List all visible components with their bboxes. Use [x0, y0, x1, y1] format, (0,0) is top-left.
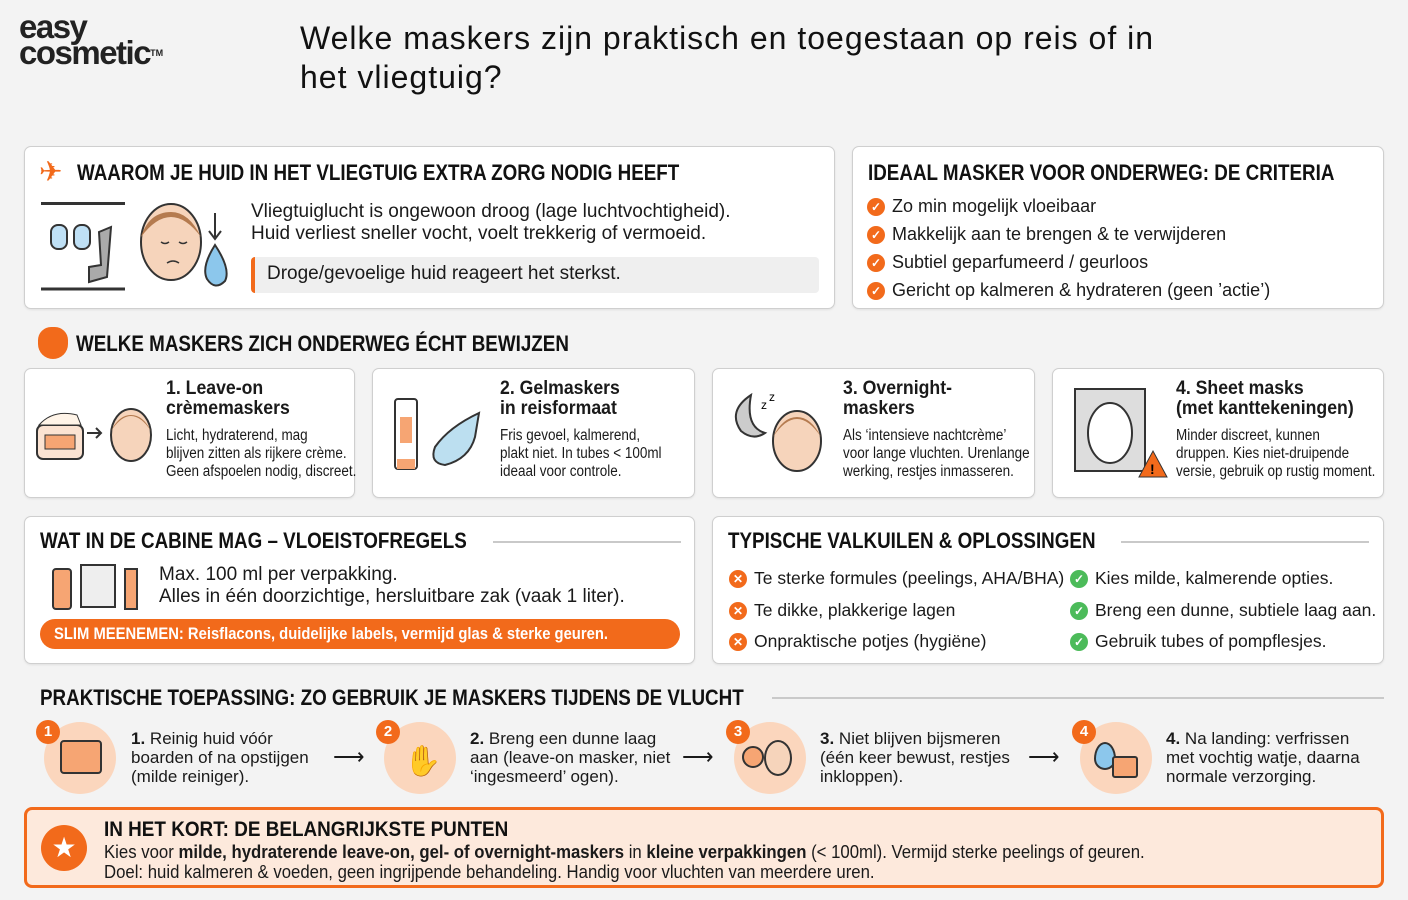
- callout: [251, 257, 819, 293]
- logo: [19, 8, 163, 71]
- icon: tube and gel: [394, 398, 480, 470]
- steps row: [36, 720, 1360, 794]
- solutions list: ✓: [1074, 604, 1084, 618]
- panel: why skin needs care: [24, 146, 835, 309]
- step 2: ✋: [404, 745, 441, 778]
- callout: orange bar: SLIM MEENEMEN: Reisflacons, duidelijke labels, vermijd glas & sterke geuren.: [54, 624, 608, 643]
- text block: [159, 564, 625, 607]
- text block: Vliegtuiglucht is ongewoon droog (lage luchtvochtigheid).: [251, 201, 731, 222]
- checklist: ✓: [871, 256, 881, 270]
- card 3: voor lange vluchten. Urenlange: [843, 445, 1030, 462]
- checklist: Gericht op kalmeren & hydrateren (geen ’actie’): [892, 280, 1270, 300]
- section heading: WELKE MASKERS ZICH ONDERWEG ÉCHT BEWIJZEN: [76, 331, 569, 356]
- card 4: druppen. Kies niet-druipende: [1176, 445, 1349, 462]
- step 4: 4: [1080, 723, 1088, 740]
- step 2: [376, 720, 670, 794]
- step 3: (één keer bewust, restjes: [820, 748, 1010, 767]
- step 4: 4. Na landing: verfrissen: [1166, 729, 1349, 748]
- icon: mask: [38, 327, 68, 359]
- arrow: ⟶: [333, 744, 365, 769]
- checklist: [867, 196, 1270, 300]
- heading: IDEAAL MASKER VOOR ONDERWEG: DE CRITERIA: [868, 160, 1334, 185]
- card 4: [1052, 368, 1384, 498]
- icon: moon and face: z: [761, 398, 767, 412]
- section heading: practical: PRAKTISCHE TOEPASSING: ZO GEBRUIK JE MASKERS TIJDENS DE VLUCHT: [40, 685, 744, 710]
- card text: 2. Gelmaskers: [500, 378, 620, 399]
- title: Welke maskers zijn praktisch en toegestaan op reis of in: [300, 20, 1154, 56]
- checklist: ✓: [871, 228, 881, 242]
- step 3: [726, 720, 1010, 794]
- step 1: boarden of na opstijgen: [131, 748, 309, 767]
- title: het vliegtuig?: [300, 59, 503, 95]
- title: [300, 20, 1154, 95]
- checklist: Makkelijk aan te brengen & te verwijderen: [892, 224, 1226, 244]
- card text: maskers: [843, 398, 915, 419]
- step 1: 1. Reinig huid vóór: [131, 729, 273, 748]
- solutions list: Kies milde, kalmerende opties.: [1095, 568, 1333, 588]
- icon: cabin and face: [41, 202, 228, 290]
- icon: plane: ✈: [39, 155, 62, 188]
- card 3: werking, restjes inmasseren.: [843, 463, 1014, 480]
- text block: [251, 201, 731, 244]
- text block: Huid verliest sneller vocht, voelt trekkerig of vermoeid.: [251, 223, 706, 244]
- card 3: Als ‘intensieve nachtcrème’: [843, 427, 1006, 444]
- icon: sheet mask warning: [1074, 388, 1168, 478]
- heading: WAT IN DE CABINE MAG – VLOEISTOFREGELS: [40, 528, 467, 553]
- card 1: Licht, hydraterend, mag: [166, 427, 308, 444]
- solutions list: Breng een dunne, subtiele laag aan.: [1095, 600, 1376, 620]
- solutions list: ✓: [1074, 635, 1084, 649]
- heading: TYPISCHE VALKUILEN & OPLOSSINGEN: [728, 528, 1096, 553]
- pitfalls list: Onpraktische potjes (hygiëne): [754, 631, 986, 651]
- step 2: 2: [384, 723, 392, 740]
- card text: crèmemaskers: [166, 398, 290, 419]
- step 4: [1072, 720, 1360, 794]
- text block: Max. 100 ml per verpakking.: [159, 564, 398, 585]
- card 4: Minder discreet, kunnen: [1176, 427, 1320, 444]
- card 1: [24, 368, 355, 498]
- step 3: inkloppen).: [820, 767, 903, 786]
- callout: orange bar: [40, 619, 680, 649]
- solutions list: Gebruik tubes of pompflesjes.: [1095, 631, 1327, 651]
- icon: moon and face: [734, 390, 822, 472]
- step 4: met vochtig watje, daarna: [1166, 748, 1360, 767]
- pitfalls list: ✕: [733, 635, 743, 649]
- text block: Alles in één doorzichtige, hersluitbare zak (vaak 1 liter).: [159, 586, 625, 607]
- pitfalls list: Te dikke, plakkerige lagen: [754, 600, 955, 620]
- pitfalls list: ✕: [733, 572, 743, 586]
- card 2: Fris gevoel, kalmerend,: [500, 427, 640, 444]
- panel: liquid rules: [24, 516, 695, 664]
- step 2: ‘ingesmeerd’ ogen).: [470, 767, 619, 786]
- step 3: 3. Niet blijven bijsmeren: [820, 729, 1000, 748]
- step 3: 3: [734, 723, 742, 740]
- card text: 4. Sheet masks: [1176, 378, 1304, 399]
- step 2: 2. Breng een dunne laag: [470, 729, 656, 748]
- card 3: [712, 368, 1035, 498]
- card text: in reisformaat: [500, 398, 617, 419]
- solutions list: ✓: [1074, 572, 1084, 586]
- card 1: blijven zitten als rijkere crème.: [166, 445, 347, 462]
- summary text: Kies voor milde, hydraterende leave-on, gel- of overnight-maskers in kleine verpakkingen (< 100ml). Vermijd sterke peelings of geuren.: [104, 842, 1145, 862]
- icon: jar to face: [36, 408, 152, 462]
- icon: moon and face: z: [769, 390, 775, 404]
- card text: [843, 378, 952, 419]
- summary box: [24, 807, 1384, 888]
- checklist: Zo min mogelijk vloeibaar: [892, 196, 1096, 216]
- checklist: Subtiel geparfumeerd / geurloos: [892, 252, 1148, 272]
- step 4: normale verzorging.: [1166, 767, 1316, 786]
- card text: 1. Leave-on: [166, 378, 263, 399]
- arrow: ⟶: [1028, 744, 1060, 769]
- icon: sheet mask warning: !: [1150, 461, 1155, 477]
- logo: cosmeticTM: [19, 34, 163, 71]
- step 1: (milde reiniger).: [131, 767, 249, 786]
- icon: bottles and bag: [52, 564, 138, 610]
- callout: Droge/gevoelige huid reageert het sterkst.: [267, 263, 621, 284]
- card text: 3. Overnight-: [843, 378, 952, 399]
- pitfalls list: [729, 568, 1064, 651]
- summary text: [104, 842, 1145, 882]
- arrow: ⟶: [682, 744, 714, 769]
- solutions list: [1070, 568, 1376, 651]
- pitfalls list: Te sterke formules (peelings, AHA/BHA): [754, 568, 1064, 588]
- step 1: [36, 720, 309, 794]
- card text: [500, 378, 620, 419]
- panel: pitfalls: [712, 516, 1384, 664]
- panel: criteria: [852, 146, 1384, 309]
- card 4: versie, gebruik op rustig moment.: [1176, 463, 1375, 480]
- summary text: Doel: huid kalmeren & voeden, geen ingrijpende behandeling. Handig voor vluchten van meerdere uren.: [104, 862, 875, 882]
- logo: easy: [19, 8, 86, 45]
- pitfalls list: ✕: [733, 604, 743, 618]
- card text: (met kanttekeningen): [1176, 398, 1354, 419]
- card 2: ideaal voor controle.: [500, 463, 621, 480]
- icon: star: [41, 825, 87, 871]
- card 1: Geen afspoelen nodig, discreet.: [166, 463, 356, 480]
- checklist: ✓: [871, 284, 881, 298]
- summary heading: IN HET KORT: DE BELANGRIJKSTE PUNTEN: [104, 818, 508, 841]
- card text: [166, 378, 290, 419]
- step 1: 1: [44, 723, 52, 740]
- checklist: ✓: [871, 200, 881, 214]
- icon: star: ★: [51, 831, 77, 864]
- step 2: aan (leave-on masker, niet: [470, 748, 670, 767]
- card 2: [372, 368, 695, 498]
- card 2: plakt niet. In tubes < 100ml: [500, 445, 662, 462]
- heading: WAAROM JE HUID IN HET VLIEGTUIG EXTRA ZORG NODIG HEEFT: [77, 160, 679, 185]
- card text: [1176, 378, 1354, 419]
